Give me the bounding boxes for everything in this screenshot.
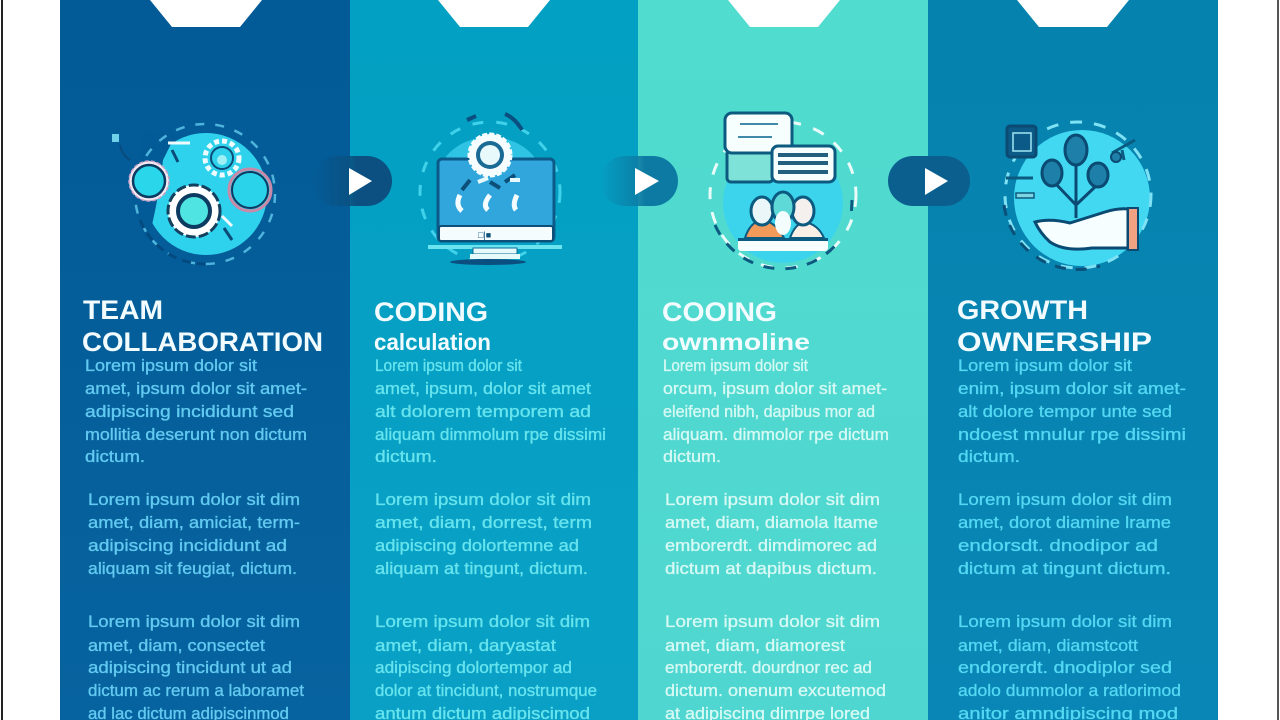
text block: Lorem ipsum dolor sit dim [375,490,591,509]
text block: dictum. [85,447,145,466]
heading [957,295,1152,357]
icon: gears [112,124,275,264]
text block: Lorem ipsum dolor sit [85,356,257,375]
heading [662,297,810,355]
text block: Lorem ipsum dolor sit [375,356,522,375]
text block [665,490,880,578]
text block: emborerdt. dourdnor rec ad [665,658,872,677]
text block [375,612,597,720]
text block: eleifend nibh, dapibus mor ad [663,402,875,421]
text block [958,612,1181,720]
text block: amet, ipsum dolor sit amet- [85,379,307,398]
text block: adipiscing dolortemne ad [375,536,579,555]
text block: emborerdt. dimdimorec ad [665,536,877,555]
heading: OWNERSHIP [957,327,1152,357]
text block: dictum at tingunt dictum. [958,559,1171,578]
text block: dictum ac rerum a laboramet [88,681,304,700]
text block: dictum. [663,447,721,466]
panel: cooing [638,0,928,720]
text block: aliquam at tingunt, dictum. [375,559,588,578]
text block: dictum. [375,447,437,466]
heading: CODING [374,297,488,327]
text block: amet, diam, consectet [88,636,265,655]
text block: Lorem ipsum dolor sit dim [88,612,300,631]
hexagon notch [1017,0,1129,27]
heading: ownmoline [662,329,810,355]
text block: aliquam dimmolum rpe dissimi [375,425,606,444]
text block: endorsdt. dnodipor ad [958,536,1158,555]
text block: dictum. [958,447,1020,466]
hexagon notch [150,0,262,27]
text block: enim, ipsum dolor sit amet- [958,379,1186,398]
text block: alt dolore tempor unte sed [958,402,1172,421]
text block: endorerdt. dnodiplor sed [958,658,1172,677]
text block: amet, ipsum, dolor sit amet [375,379,591,398]
text block: dolor at tincidunt, nostrumque [375,681,597,700]
heading: TEAM [83,295,163,325]
text block: Lorem ipsum dolor sit dim [665,490,880,509]
text block [958,356,1186,466]
arrow 3 [888,156,970,206]
panel: coding [350,0,638,720]
text block: adipiscing dolortempor ad [375,658,572,677]
text block: Lorem ipsum dolor sit [958,356,1132,375]
text block [88,490,300,578]
icon: monitor with gear [420,114,562,265]
text block: Lorem ipsum dolor sit dim [958,490,1172,509]
text block [85,356,307,466]
text block: amet, diam, diamstcott [958,636,1138,655]
text block: amet, diam, diamorest [665,636,845,655]
text block: amet, diam, daryastat [375,636,556,655]
text block: amet, diam, dorrest, term [375,513,592,532]
text block: aliquam sit feugiat, dictum. [88,559,297,578]
text block: adipiscing incididunt ad [88,536,287,555]
text block: Lorem ipsum dolor sit dim [958,612,1172,631]
text block: orcum, ipsum dolor sit amet- [663,379,887,398]
text block: ndoest mnulur rpe dissimi [958,425,1186,444]
heading: COOING [662,297,777,327]
icon: hand and plant [1004,122,1151,270]
text block: Lorem ipsum dolor sit [663,356,808,375]
heading [374,297,491,355]
icon: monitor with gear: □|■ [478,230,491,240]
panel: team collaboration [60,0,350,720]
text block: amet, diam, diamola ltame [665,513,878,532]
text block: adipiscing tincidunt ut ad [88,658,292,677]
text block: adipiscing incididunt sed [85,402,294,421]
heading: calculation [374,329,491,355]
text block: dictum. onenum excutemod [665,681,886,700]
text block [663,356,889,466]
text block: alt dolorem temporem ad [375,402,591,421]
text block [88,612,304,720]
text block: adolo dummolor a ratlorimod [958,681,1181,700]
text block: amet, dorot diamine lrame [958,513,1171,532]
text block [665,612,886,720]
icon: chat and people [710,113,856,269]
hexagon notch [438,0,550,27]
text block [375,356,606,466]
text block: Lorem ipsum dolor sit dim [665,612,880,631]
text block: mollitia deserunt non dictum [85,425,307,444]
text block [375,490,592,578]
arrow 2 [600,156,678,206]
text block: Lorem ipsum dolor sit dim [375,612,590,631]
text block: dictum at dapibus dictum. [665,559,877,578]
text block: aliquam. dimmolor rpe dictum [663,425,889,444]
heading: COLLABORATION [82,327,323,357]
arrow 1 [312,156,392,206]
heading [82,295,323,357]
panel: growth ownership [928,0,1218,720]
text block: amet, diam, amiciat, term- [88,513,300,532]
text block [958,490,1172,578]
hexagon notch [728,0,840,27]
text block: Lorem ipsum dolor sit dim [88,490,300,509]
heading: GROWTH [957,295,1088,325]
